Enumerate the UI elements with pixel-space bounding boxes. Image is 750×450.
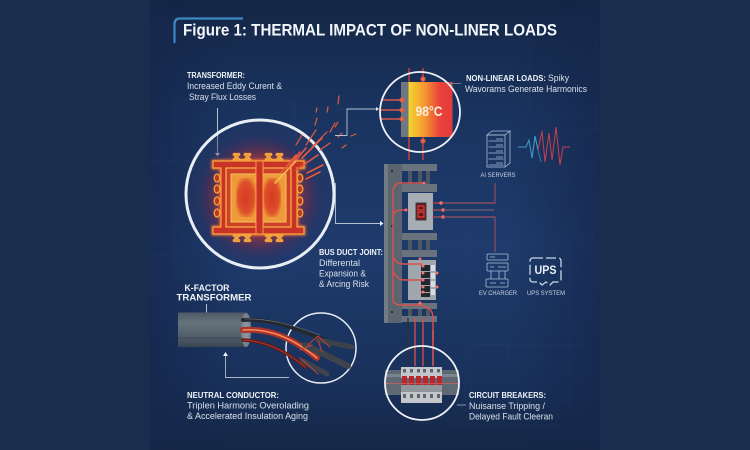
damaged conductor ends [300,336,352,374]
icon: AI servers rack [487,131,510,167]
red bus wiring [393,183,441,340]
text: circuit breakers: Nuisanse Tripping / [469,401,545,411]
conductors [243,319,325,367]
heading: K-factor transformer: K-FACTOR [184,283,230,293]
text: transformer: Stray Flux Losses [189,92,256,102]
text: transformer: Increased Eddy Curent & [187,81,282,91]
label: UPS system: UPS SYSTEM [527,290,565,297]
breaker ring [385,346,459,420]
fault line [385,382,459,384]
tripped breaker indicators [402,376,442,385]
arrow: transformer to bus duct [336,183,384,226]
icon: EV charger [486,254,508,287]
connectors: loads wiring [443,183,495,252]
text: bus duct joint: & Arcing Risk [319,279,369,289]
cable end [241,313,251,347]
text: bus duct joint [319,248,383,289]
panel: bus duct assembly [384,164,445,340]
temperature reading: 98°C [416,104,443,119]
red display [416,203,426,220]
arrow: transformer label to core [215,108,220,156]
sparks [275,96,356,183]
arrow: transformer to hot joint [335,107,379,136]
transformer circle ring [186,120,334,268]
title [174,18,557,43]
text: circuit breakers: CIRCUIT BREAKERS: [469,391,546,400]
panel: neutral conductor cable [178,312,356,383]
text: neutral conductor [187,391,309,421]
hot joint heat block [408,82,452,137]
panel: circuit breakers circle [385,346,459,420]
text: transformer: TRANSFORMER: [187,71,245,80]
heading: K-factor transformer: TRANSFORMER [176,292,252,302]
label: AI servers: AI SERVERS [480,172,516,179]
hot spots [404,182,445,304]
text: bus duct joint: Expansion & [319,268,366,278]
text: non-linear loads: Wavorams Generate Harmonics [465,84,587,94]
leader: circuit breakers [457,404,466,406]
chart: harmonic waveform [518,127,570,165]
text: non-linear loads: NON-LINEAR LOADS: [466,74,546,83]
heat arrows [381,77,425,143]
cable jacket [178,312,251,347]
panel: transformer magnified circle [186,96,356,268]
arrow: K-factor to cable [204,304,209,318]
icon: transformer core glowing [213,154,304,241]
bus duct cross bars [402,164,437,322]
DIN rail [385,370,459,395]
coil tabs [233,154,283,241]
hot spot ring [380,72,460,152]
text: circuit breakers [469,391,553,422]
text: bus duct joint: Differental [319,258,360,268]
icon: UPS speech bubble: UPS [534,263,556,277]
arrow: neutral conductor callout [223,352,289,378]
lower breaker box [408,260,436,300]
bus duct left column [384,164,402,323]
leader: non-linear loads [449,82,461,84]
text: circuit breakers: Delayed Fault Cleeran [469,412,553,422]
upper joint box [408,193,433,230]
text: neutral conductor: Triplen Harmonic Overolading [187,400,309,410]
hot joint gray strip [401,82,409,137]
text: neutral conductor: & Accelerated Insulation Aging [187,411,308,421]
icon: UPS speech bubble [530,258,561,285]
breaker bodies [401,367,442,403]
text: non-linear loads: Spiky [548,73,569,83]
text: bus duct joint: BUS DUCT JOINT: [319,248,383,257]
text: neutral conductor: NEUTRAL CONDUCTOR: [187,391,279,400]
text: transformer [187,71,282,102]
cable ring [286,313,356,383]
title bracket [174,18,243,43]
central panel [150,0,600,450]
panel: thermal hot spot circle [380,68,460,160]
title text: Figure 1: THERMAL IMPACT OF NON-LINER LOADS [183,22,557,40]
label: EV charger: EV CHARGER [479,290,517,297]
heading: K-factor transformer [176,283,252,302]
wires: bus duct to breakers [408,318,433,366]
text: non-linear loads [465,73,587,94]
